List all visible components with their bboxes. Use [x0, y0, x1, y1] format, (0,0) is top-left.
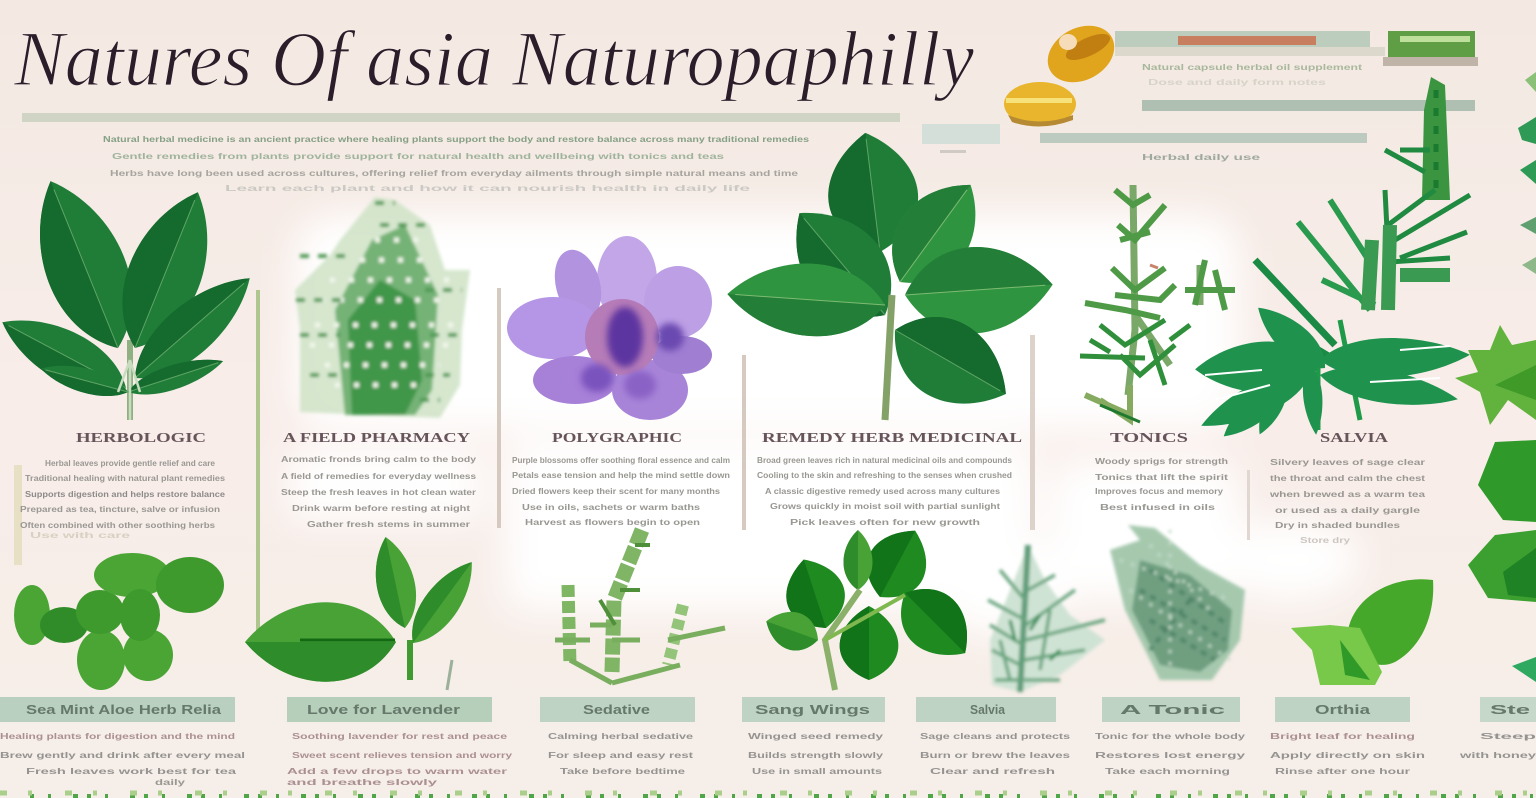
bottom text rows: Burn or brew the leaves	[920, 751, 1071, 760]
plant: dill bush	[295, 197, 470, 418]
plant: large mint leaves	[725, 127, 1056, 428]
bottom text rows: Rinse after one hour	[1275, 767, 1410, 776]
bottom text rows: Take before bedtime	[560, 767, 686, 776]
white glow behind plants	[290, 215, 1360, 635]
bottom text rows: Brew gently and drink after every meal	[0, 751, 245, 760]
headings: POLYGRAPHIC	[552, 431, 682, 446]
bottom text rows: Builds strength slowly	[748, 751, 884, 760]
bottom label bands: Salvia	[970, 702, 1006, 717]
body text: column 4	[757, 456, 1013, 527]
herb: bright leaf	[1291, 579, 1433, 685]
headings: REMEDY HERB MEDICINAL	[762, 431, 1022, 446]
bottom text rows: with honey	[1458, 751, 1536, 760]
bottom text rows: Calming herbal sedative	[548, 732, 694, 741]
intro text: Herbs have long been used across cultures, offering relief from everyday ailments through simple natural means and time	[110, 169, 799, 178]
headings: HERBOLOGIC	[76, 431, 206, 446]
body text: column 6: Dry in shaded bundles	[1275, 521, 1401, 530]
body text: column 3: Purple blossoms offer soothing floral essence and calm	[512, 456, 730, 465]
plant: right edge herbs	[1455, 72, 1536, 682]
bottom text rows: Add a few drops to warm water	[287, 767, 507, 776]
body text: column 4: Cooling to the skin and refreshing to the senses when crushed	[757, 471, 1012, 480]
title underline	[22, 113, 900, 122]
body text: column 3: Use in oils, sachets or warm baths	[522, 503, 701, 512]
bottom text rows: Sweet scent relieves tension and worry	[292, 751, 513, 760]
body text: column 1: Traditional healing with natural plant remedies	[25, 474, 226, 483]
body text: column 2: Drink warm before resting at night	[292, 504, 470, 513]
top right panel: Natural capsule herbal oil supplement	[1142, 63, 1363, 72]
headings: A FIELD PHARMACY	[283, 431, 470, 446]
body text: column 2	[281, 455, 477, 529]
herb: round dill tuft	[1110, 525, 1245, 680]
bottom text rows: Tonic for the whole body	[1095, 732, 1246, 741]
bottom label bands: Orthia	[1315, 702, 1371, 717]
top right panel: Herbal daily use	[1142, 153, 1261, 162]
intro text	[103, 135, 810, 193]
herb: light mint cluster	[14, 553, 224, 690]
bottom text rows: For sleep and easy rest	[548, 751, 694, 760]
body text: column 1: Herbal leaves provide gentle relief and care	[45, 459, 216, 468]
title: Natures Of asia Naturopaphilly	[13, 15, 974, 102]
body text: column 6: Store dry	[1300, 536, 1351, 545]
body text: column 3: Dried flowers keep their scent for many months	[512, 487, 721, 496]
intro text: Natural herbal medicine is an ancient practice where healing plants support the body and restore balance across many traditional remedies	[103, 135, 810, 144]
body text: column 2: A field of remedies for everyday wellness	[281, 472, 477, 481]
bottom text rows: Bright leaf for healing	[1270, 732, 1415, 741]
bottom text rows: Steep	[1480, 732, 1536, 741]
grass strip along bottom	[0, 793, 1536, 796]
body text: column 2: Gather fresh stems in summer	[307, 520, 470, 529]
body text: column 3: Petals ease tension and help the mind settle down	[512, 471, 730, 480]
bottom label bands: Sedative	[583, 702, 650, 717]
bottom text rows: Use in small amounts	[752, 767, 883, 776]
intro text: Learn each plant and how it can nourish health in daily life	[225, 184, 751, 193]
body text: column 1: Often combined with other soothing herbs	[20, 521, 216, 530]
bottom text rows: daily	[155, 778, 186, 787]
bottom label bands: Sang Wings	[755, 702, 870, 717]
bottom label bands	[0, 697, 1536, 722]
body text: column 6: or used as a daily gargle	[1275, 506, 1421, 515]
body text: column 4: A classic digestive remedy used across many cultures	[765, 487, 1001, 496]
top right panel	[922, 31, 1478, 162]
intro text: Gentle remedies from plants provide support for natural health and wellbeing with tonics and teas	[112, 152, 725, 161]
bottom text rows: Take each morning	[1105, 767, 1230, 776]
plant: sprig lower needles	[1194, 296, 1471, 446]
body text: column 4: Pick leaves often for new growth	[790, 518, 980, 527]
body text: column 1	[20, 459, 226, 540]
headings: SALVIA	[1320, 431, 1389, 446]
bottom text rows	[0, 732, 1536, 787]
column dividers	[14, 288, 1250, 640]
herb: pointed green leaves	[245, 533, 486, 690]
body text: column 6: Silvery leaves of sage clear	[1270, 458, 1425, 467]
bottom text rows: Winged seed remedy	[748, 732, 884, 741]
plant: rosemary sprig	[1080, 185, 1235, 422]
bottom text rows: Restores lost energy	[1095, 751, 1246, 760]
herb: pale needle sprig	[988, 545, 1105, 692]
bottom text rows: Sage cleans and protects	[920, 732, 1071, 741]
headings	[76, 431, 1389, 446]
bottom text rows: Apply directly on skin	[1270, 751, 1425, 760]
body text: column 6: when brewed as a warm tea	[1269, 490, 1426, 499]
plant: tall green sprig	[1255, 77, 1470, 430]
body text: column 3	[512, 456, 730, 527]
body text: column 2: Steep the fresh leaves in hot clean water	[281, 488, 476, 497]
herb: pale green sprigs	[555, 530, 725, 683]
bottom text rows: Clear and refresh	[930, 767, 1055, 776]
body text: column 5: Tonics that lift the spirit	[1095, 473, 1228, 482]
body text: column 2: Aromatic fronds bring calm to the body	[281, 455, 477, 464]
top right panel: Dose and daily form notes	[1148, 78, 1327, 87]
body text: column 1: Prepared as tea, tincture, salve or infusion	[20, 505, 220, 514]
icon: golden capsules	[1004, 15, 1124, 127]
plant: broad dark leaves	[0, 166, 266, 420]
bottom text rows: Fresh leaves work best for tea	[26, 767, 237, 776]
body text: column 5: Woody sprigs for strength	[1095, 457, 1228, 466]
body text: column 5	[1095, 457, 1228, 512]
bottom label bands: Sea Mint Aloe Herb Relia	[26, 702, 222, 717]
bottom text rows: Soothing lavender for rest and peace	[292, 732, 508, 741]
body text: column 1: Supports digestion and helps restore balance	[25, 490, 226, 499]
body text: column 1: Use with care	[30, 531, 131, 540]
bottom label bands: Love for Lavender	[307, 702, 460, 717]
body text: column 6: the throat and calm the chest	[1270, 474, 1425, 483]
body text: column 4: Broad green leaves rich in natural medicinal oils and compounds	[757, 456, 1013, 465]
bottom label bands: Ste	[1490, 702, 1530, 717]
headings: TONICS	[1110, 431, 1188, 446]
body text: column 3: Harvest as flowers begin to open	[525, 518, 700, 527]
bottom text rows: Healing plants for digestion and the mind	[0, 732, 235, 741]
bottom text rows: and breathe slowly	[287, 778, 438, 787]
body text: column 5: Best infused in oils	[1100, 503, 1216, 512]
bottom label bands: A Tonic	[1120, 702, 1225, 717]
body text: column 4: Grows quickly in moist soil with partial sunlight	[770, 502, 1000, 511]
plant: purple flower	[507, 236, 712, 420]
herb: dark branching leaves	[760, 517, 986, 690]
body text: column 5: Improves focus and memory	[1095, 487, 1224, 496]
body text: column 6	[1269, 458, 1426, 545]
